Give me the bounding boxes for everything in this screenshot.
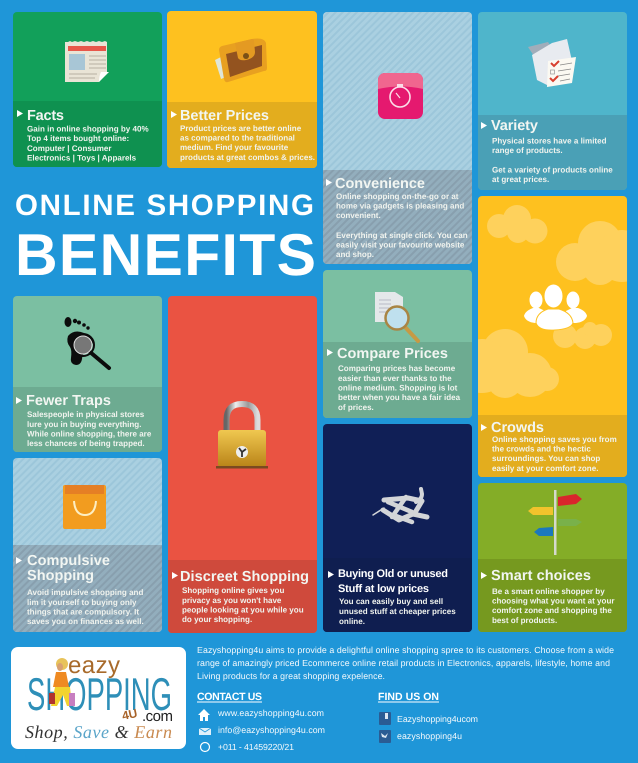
text block: lim it yourself to buying only [27, 598, 137, 607]
text block [339, 597, 456, 626]
icon: pile of items [373, 489, 427, 522]
about paragraph: Living products for a great shopping expelence. [197, 671, 385, 681]
contact us: www.eazyshopping4u.com [217, 708, 324, 718]
text block [338, 364, 461, 412]
text block: online. [339, 617, 365, 626]
panel: variety [478, 12, 627, 190]
text block: surroundings. You can shop [492, 454, 600, 463]
about paragraph: range of amazingly priced Ecommerce online retail products in Electronics, apparels, lifestyle, home and [197, 658, 610, 668]
title: BENEFITS [15, 222, 316, 288]
text block [492, 136, 613, 184]
arrow [481, 572, 487, 579]
panel: buying old [323, 424, 472, 632]
icon: padlock [216, 404, 268, 468]
contact us: info@eazyshopping4u.com [218, 725, 325, 735]
text block [27, 124, 149, 162]
text block: You can easily buy and sell [339, 597, 443, 606]
find us on: Eazyshopping4ucom [397, 714, 478, 724]
contact us [197, 691, 325, 752]
arrow [481, 122, 487, 129]
arrow [326, 179, 332, 186]
text block: things that are compulsory. It [27, 608, 139, 616]
logo: Shop, Save & Earn [25, 722, 172, 742]
text block: and shop. [336, 250, 374, 259]
about paragraph: Eazyshopping4u aims to provide a delightful online shopping spree to its customers. Choose from a wide [197, 645, 614, 655]
icon: people [524, 284, 587, 330]
heading [338, 568, 448, 595]
text block: easier than ever thanks to the [338, 374, 452, 383]
panel: facts [13, 12, 162, 167]
icon: twitter [379, 730, 391, 743]
text block: better when you have a fair idea [338, 393, 461, 402]
heading: Stuff at low prices [338, 583, 429, 595]
text block: Comparing prices has become [338, 364, 456, 373]
text block: range of products. [492, 146, 563, 155]
heading: Facts [27, 108, 64, 124]
panel: fewer traps [13, 296, 162, 452]
text block: Online shopping on-the-go or at [336, 192, 459, 201]
heading: Variety [491, 118, 538, 134]
panel: discreet shopping [168, 296, 317, 633]
text block [492, 435, 617, 473]
text block: products at great combos & prices. [180, 153, 315, 162]
arrow [481, 424, 487, 431]
arrow [171, 111, 177, 118]
text block [27, 410, 152, 448]
icon: shopping bag [63, 485, 106, 529]
text block [336, 192, 468, 259]
panel: smart choices [478, 483, 627, 632]
text block: lure you in buying everything. [27, 420, 141, 429]
logo: .com [142, 708, 173, 725]
icon: stopwatch [378, 73, 423, 119]
text block: Be a smart online shopper by [492, 587, 605, 596]
logo: SHOPPING [27, 668, 172, 720]
heading: Compare Prices [337, 346, 448, 362]
text block: choosing what you want at your [492, 596, 615, 606]
text block: online medium. Shopping is lot [338, 384, 458, 392]
icon: wallet [215, 38, 267, 82]
text block: convenient. [336, 211, 381, 220]
arrow [16, 397, 22, 404]
text block: medium. Find your favourite [180, 143, 289, 152]
icon: footprint with magnifier [64, 317, 109, 368]
text block: Electronics | Toys | Apparels [27, 154, 137, 162]
find us on: eazyshopping4u [397, 731, 462, 741]
text block: at great prices. [492, 175, 549, 184]
arrow [327, 349, 333, 356]
heading: Compulsive [27, 553, 110, 569]
icon: newspaper [65, 41, 109, 82]
text block: the crowds and the hectic [492, 444, 591, 454]
text block: best of products. [492, 616, 557, 625]
text block: easily at your comfort zone. [492, 464, 598, 473]
panel: compulsive shopping [13, 458, 162, 632]
title: ONLINE SHOPPING [15, 189, 314, 222]
text block: Online shopping saves you from [492, 435, 617, 444]
text block: privacy as you won't have [182, 596, 282, 605]
title [15, 189, 316, 288]
text block [27, 588, 144, 626]
text block [492, 587, 615, 625]
text block: do your shopping. [182, 615, 252, 624]
text block: of prices. [338, 403, 374, 412]
heading: Buying Old or unused [338, 568, 448, 580]
clouds [478, 205, 627, 398]
heading: Fewer Traps [26, 393, 111, 409]
logo: 4U [121, 706, 139, 723]
text block: Everything at single click. You can [336, 231, 468, 240]
heading: Crowds [491, 420, 544, 436]
icon: home [198, 709, 210, 721]
text block: Computer | Consumer [27, 144, 112, 153]
heading: Shopping [27, 568, 94, 584]
contact us: CONTACT US [197, 691, 262, 703]
logo: eazy [68, 652, 120, 679]
text block: easily visit your favourite website [336, 240, 465, 250]
text block: as compared to the traditional [180, 134, 295, 142]
heading: Better Prices [180, 108, 269, 124]
icon: signpost [528, 490, 582, 555]
text block: While online shopping, there are [27, 430, 152, 438]
panel: better prices [167, 11, 317, 168]
text block: Get a variety of products online [492, 166, 613, 174]
about paragraph [197, 645, 614, 681]
icon: magnifier and document [375, 292, 418, 341]
text block: unused stuff at cheaper prices [339, 607, 456, 616]
text block: Avoid impulsive shopping and [27, 588, 143, 597]
text block: Shopping online gives you [182, 586, 284, 595]
text block: saves you on finances as well. [27, 617, 144, 626]
text block: Top 4 items bought online: [27, 134, 129, 143]
text block: Product prices are better online [180, 124, 302, 133]
arrow [328, 571, 334, 578]
heading [27, 553, 110, 584]
heading: Convenience [335, 176, 425, 192]
contact us: +011 - 41459220/21 [218, 742, 294, 752]
text block: Gain in online shopping by 40% [27, 124, 149, 134]
text block [182, 586, 304, 624]
find us on: FIND US ON [378, 691, 439, 703]
panel: convenience [323, 12, 472, 264]
icon: mail [199, 728, 211, 735]
arrow [172, 572, 178, 579]
heading: Discreet Shopping [180, 569, 309, 585]
panel: crowds [478, 196, 627, 477]
logo [11, 647, 186, 749]
heading: Smart choices [491, 568, 591, 584]
text block [180, 124, 315, 162]
icon: facebook [379, 712, 391, 725]
arrow [16, 557, 22, 564]
figure [49, 658, 75, 706]
find us on [378, 691, 478, 743]
arrow [17, 110, 23, 117]
text block: people looking at you while you [182, 606, 304, 614]
text block: Salespeople in physical stores [27, 410, 145, 419]
icon: documents [528, 39, 576, 87]
panel: compare prices [323, 270, 472, 418]
text block: home via gadgets is pleasing and [336, 202, 464, 210]
text block: comfort zone and shopping the [492, 606, 612, 615]
text block: Physical stores have a limited [492, 136, 607, 146]
icon: phone [200, 742, 210, 752]
text block: less chances of being trapped. [27, 439, 145, 448]
